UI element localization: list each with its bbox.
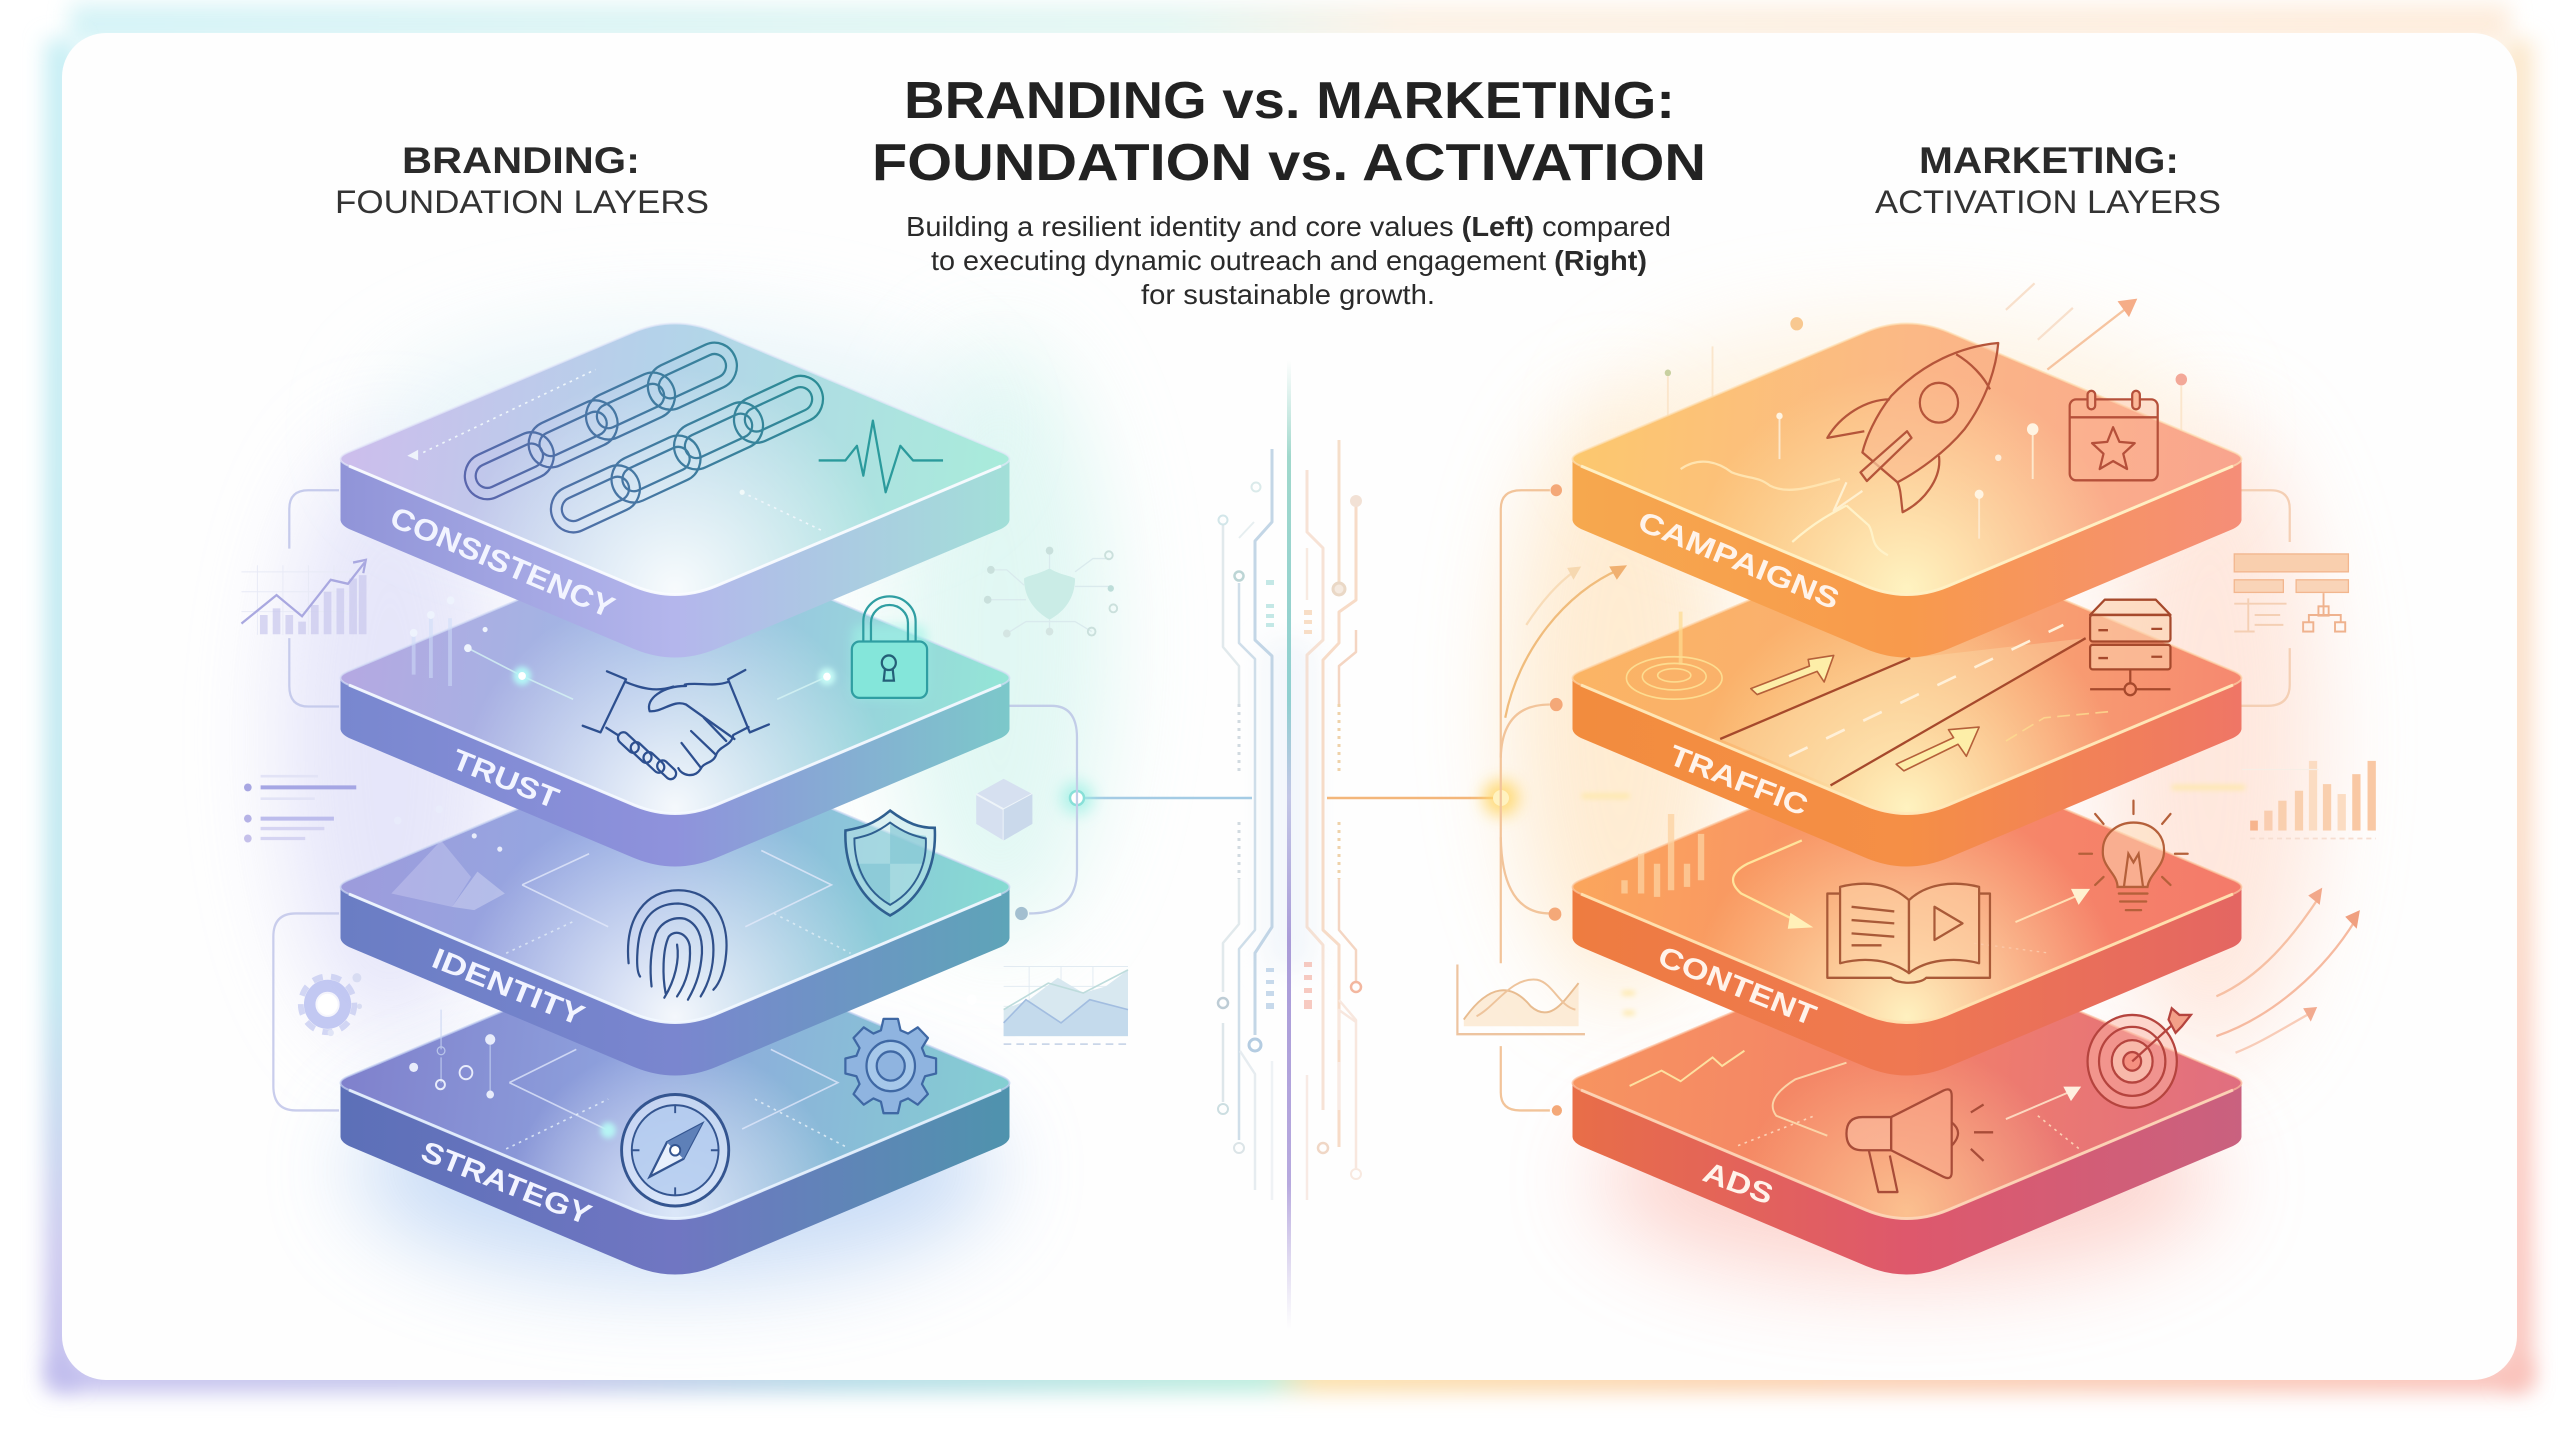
main title [872, 72, 1706, 192]
label: content: CONTENT [1653, 941, 1821, 1033]
subtitle paragraph: to executing dynamic outreach and engagement (Right) [931, 245, 1647, 276]
label: campaigns: CAMPAIGNS [1633, 506, 1844, 616]
chart: wave lines [1457, 965, 1585, 1034]
plate circuit details [409, 1010, 847, 1149]
aura: branding stack glow [280, 320, 1110, 1280]
layer: campaigns [1572, 324, 2242, 658]
ripple [1626, 612, 2114, 741]
icon: compass [622, 1095, 729, 1206]
icon: gantt and org chart [2234, 554, 2348, 632]
road [1720, 625, 2086, 785]
arrows rising to campaigns [1505, 565, 1627, 718]
icon: rocket [1827, 343, 1998, 512]
icon: handshake [583, 670, 769, 781]
plate details and mountains [391, 805, 851, 953]
subtitle paragraph: Building a resilient identity and core values (Left) compared [906, 211, 1671, 242]
icon: padlock [852, 596, 927, 698]
label: identity: IDENTITY [427, 943, 589, 1033]
chart: area trend [967, 967, 1128, 1044]
left column heading [335, 140, 709, 220]
icon: megaphone [1846, 1089, 1993, 1192]
right column heading: ACTIVATION LAYERS [1875, 184, 2221, 220]
circuit traces: branding side [1218, 449, 1272, 1200]
subtitle paragraph: for sustainable growth. [1141, 279, 1435, 310]
icon: growth chart [241, 560, 366, 635]
icon: server [2090, 600, 2170, 695]
connector: branding to divider [1061, 782, 1252, 814]
icon: calendar star [2070, 391, 2158, 480]
connector: hub to plates [1501, 490, 1550, 1110]
icon: list lines [244, 776, 356, 842]
label: strategy: STRATEGY [416, 1136, 596, 1232]
left column heading: BRANDING: [402, 140, 640, 181]
right column heading [1875, 140, 2221, 220]
label: ads: ADS [1699, 1157, 1777, 1211]
right side decorations [1457, 283, 2376, 1116]
icon: open book with play [1827, 884, 1990, 983]
icon: gear [845, 1019, 936, 1113]
left column heading: FOUNDATION LAYERS [335, 184, 709, 220]
chart: bars [2242, 761, 2376, 838]
label: consistency: CONSISTENCY [385, 501, 619, 625]
flow arrows [1751, 655, 1979, 771]
subtitle paragraph [906, 211, 1671, 310]
plate dotted details [407, 370, 825, 532]
circuit traces: marketing side [1307, 440, 1362, 1200]
icon: fingerprint [628, 890, 727, 1000]
aura: marketing stack glow [1510, 320, 2320, 1280]
smoke and dots [1681, 413, 2038, 555]
icon: shield network [984, 547, 1117, 638]
layer: ads [1572, 948, 2242, 1274]
icon: shield [845, 811, 935, 915]
left side decorations [241, 490, 1128, 1110]
connector nodes [1549, 484, 1563, 1116]
plate details [1630, 1051, 2081, 1149]
right column heading: MARKETING: [1919, 140, 2179, 181]
layer: trust [340, 542, 1010, 866]
connector: identity to strategy [273, 913, 339, 1110]
plate bars and glow nodes [410, 596, 835, 699]
central divider [1265, 360, 1313, 1330]
layer: identity [340, 752, 1010, 1076]
glow dashes [1582, 787, 2245, 1013]
layer: consistency [340, 324, 1010, 658]
main title: FOUNDATION vs. ACTIVATION [872, 134, 1706, 192]
plate bars and flow arrows [1625, 814, 2090, 953]
connector: trust to identity with node [1009, 706, 1077, 920]
icon: cube [976, 779, 1032, 840]
layer: traffic [1572, 542, 2242, 866]
connector: consistency to trust [289, 490, 339, 707]
main title: BRANDING vs. MARKETING: [904, 72, 1675, 130]
icon: light bulb [2079, 801, 2188, 910]
arrows above campaigns [1665, 283, 2187, 436]
connector: campaigns to traffic [2241, 490, 2290, 706]
icon: gear network [301, 973, 362, 1036]
icon: chain links [458, 335, 830, 540]
layer: content [1572, 752, 2242, 1076]
layer: strategy [340, 948, 1010, 1274]
icon: pulse line [819, 421, 943, 492]
label: trust: TRUST [447, 744, 564, 816]
side arrows to target [2216, 888, 2360, 1053]
icon: target [2088, 1008, 2191, 1108]
label: traffic: TRAFFIC [1664, 740, 1812, 823]
connector: marketing to divider [1327, 780, 1519, 816]
